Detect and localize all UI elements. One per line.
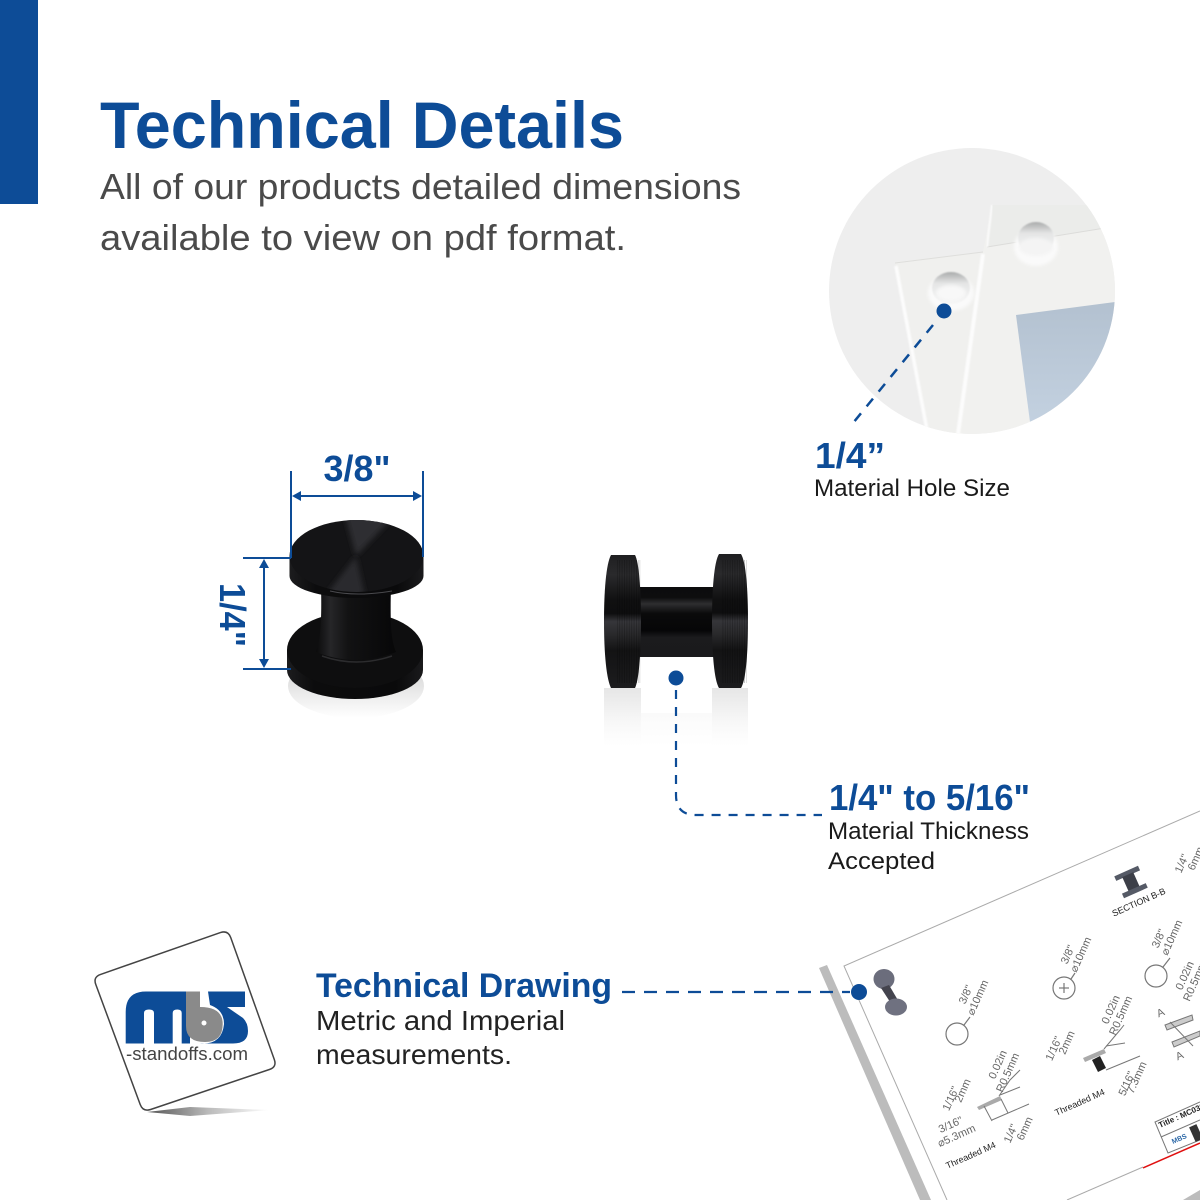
callout: material thickness: Accepted xyxy=(828,848,935,875)
product: standoff side view xyxy=(604,554,748,746)
dimension labels: 0.02in xyxy=(1100,994,1123,1026)
right acrylic plate xyxy=(958,205,1115,434)
callout: hole size marker xyxy=(849,304,952,428)
callout: material hole size: 1/4” xyxy=(815,435,885,476)
dimension labels: 6mm xyxy=(1015,1115,1036,1142)
dimension labels: 1/4" xyxy=(1002,1122,1021,1145)
detail sketches xyxy=(977,1015,1200,1121)
section and thread labels: Threaded M4 xyxy=(1053,1087,1106,1118)
width dimension xyxy=(291,471,423,558)
logo badge xyxy=(95,932,275,1116)
title: Technical Details xyxy=(100,88,624,162)
dimension labels: 7.3mm xyxy=(1125,1060,1150,1096)
dimension labels: ⌀10mm xyxy=(965,978,991,1017)
badge outline xyxy=(95,932,275,1110)
logo letter b xyxy=(186,992,223,1042)
callout: technical drawing: Metric and Imperial xyxy=(316,1005,565,1036)
callout: material hole size: Material Hole Size xyxy=(814,475,1010,502)
view circles xyxy=(946,958,1170,1045)
reflection xyxy=(288,654,424,718)
panel: material hole photo xyxy=(829,148,1115,434)
intro text: All of our products detailed dimensions xyxy=(100,166,741,207)
collar highlight xyxy=(322,656,392,662)
dimension labels: 0.02in xyxy=(987,1049,1010,1081)
shaft xyxy=(639,587,715,657)
callout: material thickness xyxy=(828,777,1030,875)
intro text xyxy=(100,166,741,258)
section and thread labels xyxy=(944,886,1186,1171)
bumper left xyxy=(928,272,974,311)
callout: material thickness: 1/4" to 5/16" xyxy=(829,777,1030,818)
badge shadow xyxy=(147,1107,270,1116)
dimension labels: 0.02in xyxy=(1174,960,1197,992)
section and thread labels: Threaded M4 xyxy=(944,1140,997,1171)
callout: technical drawing xyxy=(316,967,612,1070)
dimension labels: 3/8" xyxy=(957,983,976,1006)
right disc xyxy=(712,554,748,688)
dimension labels: 1/16" xyxy=(1044,1035,1065,1063)
product: standoff with dimensions: 3/8" xyxy=(324,448,390,489)
dimension labels: 3/16" xyxy=(937,1115,965,1136)
dimension labels xyxy=(936,845,1200,1150)
dimension labels: ⌀10mm xyxy=(1159,918,1185,957)
top head side xyxy=(290,556,424,598)
dimension labels: ⌀10mm xyxy=(1068,935,1094,974)
section and thread labels: A xyxy=(1174,1049,1186,1063)
callout: thickness marker xyxy=(668,670,822,815)
mini part model xyxy=(874,969,907,1016)
dimension labels: R0.5mm xyxy=(1107,994,1135,1037)
title block: MBS xyxy=(1171,1133,1188,1146)
dimension labels: 2mm xyxy=(953,1077,974,1104)
bumper right xyxy=(1014,222,1058,266)
product: standoff with dimensions xyxy=(212,448,424,718)
section and thread labels: SECTION B-B xyxy=(1110,886,1167,919)
dimension labels: 5/16" xyxy=(1117,1070,1138,1098)
title block xyxy=(1143,1101,1200,1168)
bottom corner shadow xyxy=(1183,1190,1200,1200)
top face xyxy=(290,520,424,592)
callout: technical drawing: measurements. xyxy=(316,1039,512,1070)
callout: material thickness: Material Thickness xyxy=(828,818,1029,845)
logo letter s xyxy=(200,992,248,1044)
sheet shadow bar xyxy=(819,965,931,1200)
product: standoff with dimensions: 1/4" xyxy=(212,583,253,647)
logo wordmark: -standoffs.com xyxy=(126,1044,248,1064)
callout: drawing connector xyxy=(622,984,867,1000)
section and thread labels: A xyxy=(1155,1006,1167,1020)
dimension labels: 1/4" xyxy=(1173,852,1192,875)
neck xyxy=(316,585,396,660)
height dimension xyxy=(243,558,291,669)
dimension labels: R0.5mm xyxy=(994,1051,1022,1094)
sheet outline xyxy=(844,811,1200,1200)
printed sheet xyxy=(1016,302,1115,422)
callout: material hole size xyxy=(814,435,1010,502)
technical drawing sheet xyxy=(819,811,1200,1200)
callout: technical drawing: Technical Drawing xyxy=(316,967,612,1005)
bottom disc xyxy=(287,650,423,699)
left disc xyxy=(604,555,641,688)
reflection xyxy=(604,688,641,746)
dimension labels: 3/8" xyxy=(1059,943,1078,966)
left acrylic plate xyxy=(895,252,983,434)
section icon xyxy=(1114,866,1148,898)
logo letter m xyxy=(126,992,190,1044)
intro text: available to view on pdf format. xyxy=(100,217,626,258)
dimension labels: ⌀5.3mm xyxy=(936,1123,978,1150)
dimension labels: 2mm xyxy=(1057,1029,1078,1056)
dimension labels: 3/8" xyxy=(1150,927,1169,950)
dimension labels: 1/16" xyxy=(941,1085,962,1113)
accent bar xyxy=(0,0,38,204)
